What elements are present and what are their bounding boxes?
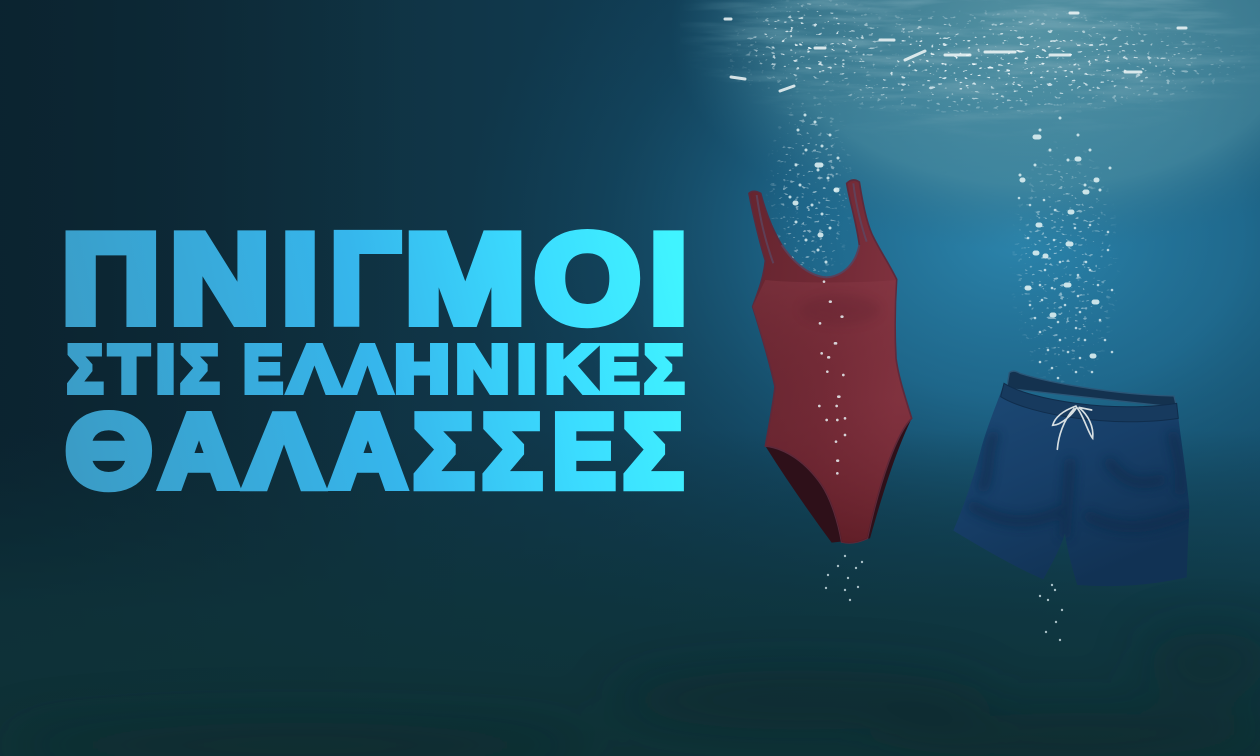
shorts fabric	[953, 383, 1189, 586]
swimsuit dark back lining	[765, 418, 912, 543]
seabed shadows	[0, 632, 1260, 756]
title line 2: Τ	[109, 333, 149, 407]
title line 1: Ν	[170, 208, 270, 349]
title line 2: Σ	[180, 333, 219, 407]
swimsuit: red one-piece	[749, 180, 912, 543]
shorts white drawstring	[1053, 406, 1093, 449]
swimsuit straps edge	[757, 183, 867, 277]
title line 3: Α	[160, 394, 238, 510]
title line 3: Λ	[246, 394, 322, 510]
title line 3: Ε	[552, 394, 616, 510]
title line 1: Μ	[405, 208, 525, 349]
title line 1: Ι	[282, 208, 318, 349]
water surface with light ripples and sparkles	[680, 0, 1260, 400]
title line 2: Η	[394, 333, 450, 407]
title line 1: Ι	[650, 208, 687, 349]
swimsuit bust shadow	[800, 295, 880, 325]
title line 2: Σ	[644, 333, 684, 407]
title line 2: Ε	[243, 333, 283, 407]
title line 1: Π	[62, 208, 160, 349]
title line 2: Ι	[156, 333, 175, 407]
title line 2: Ι	[517, 333, 536, 407]
title line 3: Α	[330, 394, 406, 510]
title line 2: Ν	[456, 333, 510, 407]
title line 1: Ο	[534, 208, 640, 349]
title line 2: Ε	[599, 333, 639, 407]
title line 3: Σ	[623, 394, 683, 510]
title line 2: Λ	[289, 333, 340, 407]
title line 2: Κ	[545, 333, 597, 407]
rising air bubbles	[790, 115, 1112, 640]
shorts back waistband	[1007, 371, 1177, 407]
swimsuit body	[749, 180, 912, 543]
title: ΠΝΙΓΜΟΙ ΣΤΙΣ ΕΛΛΗΝΙΚΕΣ ΘΑΛΑΣΣΕΣ	[62, 208, 687, 510]
swim shorts: navy	[953, 371, 1189, 586]
title line 3: Θ	[66, 394, 152, 510]
shorts elastic waistband	[1001, 383, 1178, 422]
shorts fabric folds	[973, 437, 1187, 533]
swimsuit bubbles	[819, 282, 845, 473]
title line 2: Λ	[344, 333, 391, 407]
title line 2: Σ	[67, 333, 103, 407]
swimsuit shading	[753, 280, 912, 543]
title line 3: Σ	[482, 394, 542, 510]
title line 1: Γ	[331, 208, 399, 349]
title line 3: Σ	[413, 394, 474, 510]
